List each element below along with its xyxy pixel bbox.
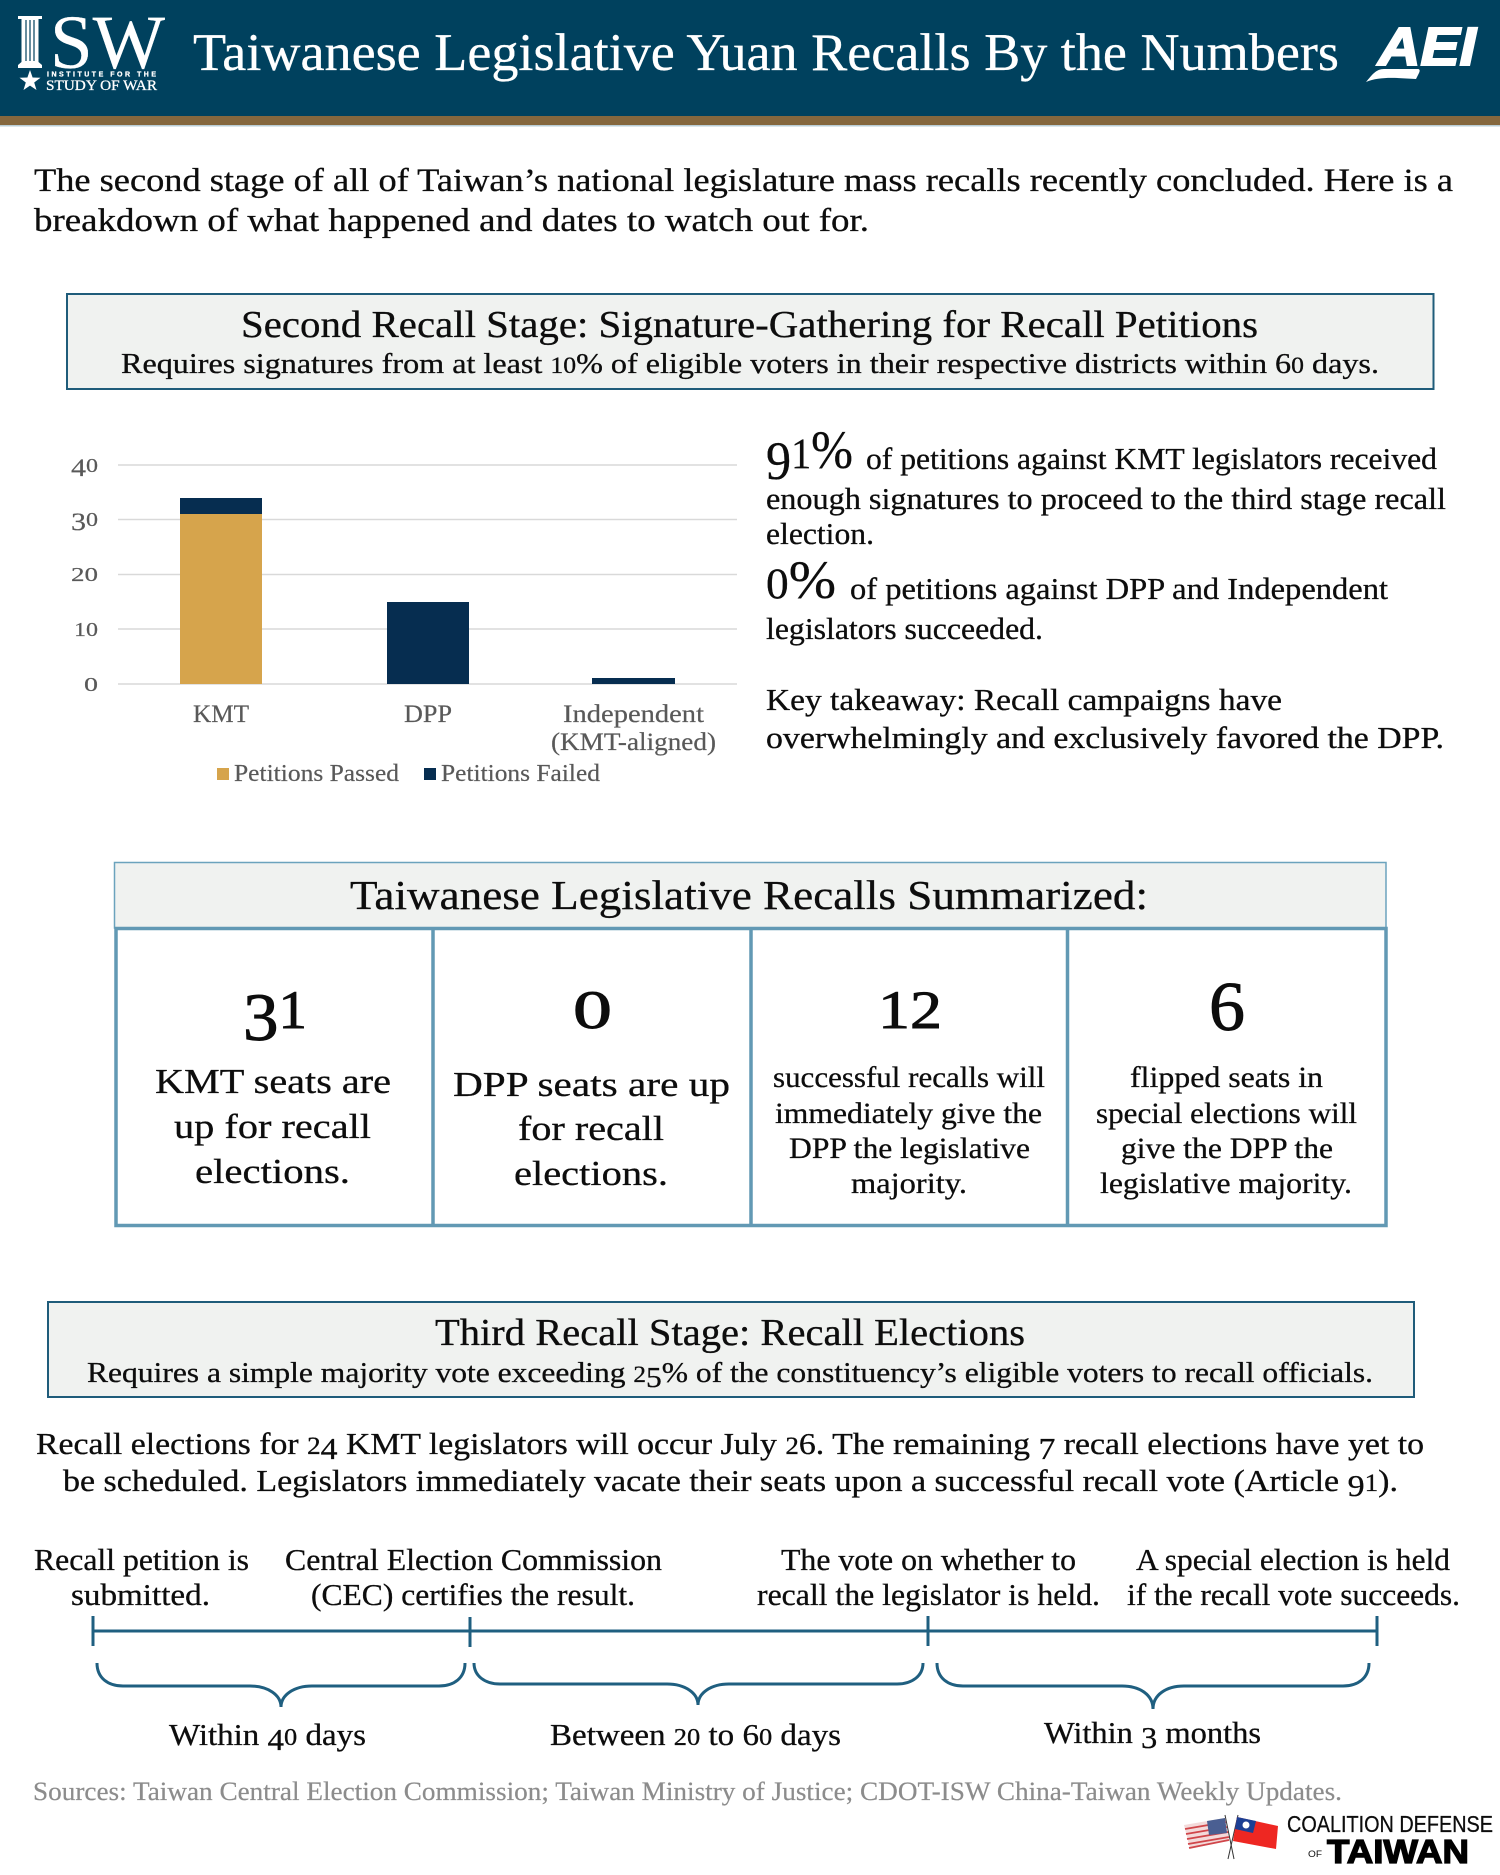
statistic: 91%: % bbox=[811, 420, 856, 480]
card: 12 successful recalls: successful recalls will bbox=[773, 1061, 1045, 1094]
text block: recall election schedule: 7 bbox=[1038, 1431, 1055, 1466]
card: 6 flipped seats: give the DPP the bbox=[1121, 1132, 1333, 1165]
text block: recall election schedule: Recall elections for 2 bbox=[36, 1426, 320, 1461]
bar: KMT bbox=[180, 498, 262, 684]
card: 0 DPP seats: for recall bbox=[518, 1109, 664, 1148]
brace: within 3 months: Within bbox=[1044, 1716, 1128, 1750]
x axis labels: (KMT-aligned) bbox=[551, 729, 716, 756]
bar chart: petitions by party bbox=[71, 455, 737, 787]
panel: second recall stage heading: Requires signatures from at least 10% of eligible voters in their respective districts within 6 0 days. bbox=[121, 348, 1379, 380]
panel: second recall stage heading bbox=[67, 294, 1434, 389]
card: 0 DPP seats: elections. bbox=[514, 1154, 668, 1193]
card: 6 flipped seats bbox=[1096, 969, 1357, 1200]
legend bbox=[217, 761, 600, 787]
AEI logo: AEI bbox=[1376, 17, 1477, 77]
header banner bbox=[0, 0, 1500, 126]
panel: recalls summarized bbox=[114, 862, 1386, 1227]
card: 31 KMT seats: up for recall bbox=[174, 1107, 371, 1146]
y axis labels bbox=[71, 455, 98, 696]
icon: crossed flags bbox=[1184, 1815, 1278, 1859]
legend: Petitions Failed bbox=[441, 761, 600, 787]
intro text bbox=[34, 163, 1453, 239]
text block: recall election schedule: 1 bbox=[1365, 1470, 1378, 1497]
timeline step labels: Central Election Commission bbox=[285, 1543, 662, 1577]
card: 31 KMT seats: 1 bbox=[279, 980, 307, 1040]
brace: within 40 days: days bbox=[305, 1718, 361, 1752]
timeline step labels: (CEC) certifies the result. bbox=[311, 1578, 635, 1612]
card: 6 flipped seats: legislative majority. bbox=[1100, 1167, 1352, 1200]
Coalition Defense of Taiwan logo: OF bbox=[1308, 1849, 1323, 1859]
legend: Petitions Passed bbox=[234, 761, 399, 787]
callout: petition statistics and key takeaway bbox=[766, 420, 1446, 755]
y axis labels: 3 bbox=[71, 509, 86, 536]
statistic: 0%: of petitions against DPP and Independent bbox=[850, 572, 1389, 606]
text block: recall election schedule: 9 bbox=[1348, 1468, 1365, 1503]
text block: recall election schedule: be scheduled. Legislators immediately vacate their seats upon a successful recall vote (Article bbox=[63, 1463, 1228, 1498]
panel: second recall stage heading: Second Recall Stage: Signature-Gathering for Recall Petitions bbox=[241, 304, 1258, 346]
Coalition Defense of Taiwan logo: TAIWAN bbox=[1327, 1833, 1469, 1870]
card: 31 KMT seats: KMT seats are bbox=[155, 1062, 391, 1101]
summary heading: Taiwanese Legislative Recalls Summarized: bbox=[350, 872, 1148, 918]
x axis labels: KMT bbox=[193, 701, 249, 728]
timeline step labels: submitted. bbox=[71, 1578, 210, 1612]
intro text: The second stage of all of Taiwan’s national legislature mass recalls recently concluded. Here is a bbox=[34, 163, 1453, 199]
timeline step labels: The vote on whether to bbox=[781, 1543, 1076, 1577]
card: 12 successful recalls: majority. bbox=[851, 1167, 967, 1200]
y axis labels: 4 bbox=[71, 455, 87, 482]
card: 31 KMT seats: elections. bbox=[195, 1152, 350, 1191]
text block: recall election schedule: 26. The remaining bbox=[785, 1426, 1011, 1461]
intro text: breakdown of what happened and dates to watch out for. bbox=[34, 203, 869, 239]
card: 12 successful recalls: 12 bbox=[878, 980, 942, 1040]
timeline step labels bbox=[34, 1543, 1460, 1612]
brace: within 40 days: Within bbox=[169, 1718, 252, 1752]
text block: recall election schedule: recall elections have yet to bbox=[1055, 1426, 1424, 1461]
card: 31 KMT seats bbox=[155, 979, 391, 1191]
statistic: 91%: enough signatures to proceed to the third stage recall bbox=[766, 482, 1446, 516]
card: 6 flipped seats: 6 bbox=[1209, 969, 1245, 1046]
brace: within 40 days: 0 bbox=[284, 1724, 297, 1751]
summary heading bbox=[114, 862, 1386, 928]
timeline step labels: if the recall vote succeeds. bbox=[1127, 1578, 1460, 1612]
card: 12 successful recalls: immediately give the bbox=[775, 1097, 1042, 1130]
timeline step labels: A special election is held bbox=[1136, 1543, 1450, 1577]
card: 12 successful recalls: DPP the legislative bbox=[789, 1132, 1030, 1165]
ISW logo bbox=[18, 1, 165, 94]
ISW logo: SW bbox=[50, 1, 165, 85]
title: Taiwanese Legislative Yuan Recalls By the Numbers bbox=[193, 24, 1339, 82]
statistic: 91% bbox=[766, 420, 1446, 551]
key takeaway bbox=[766, 683, 1444, 755]
brace: within 3 months: months bbox=[1157, 1716, 1261, 1750]
timeline step labels: recall the legislator is held. bbox=[757, 1578, 1100, 1612]
panel: third recall stage heading: of the constituency’s eligible voters to recall officials. bbox=[695, 1357, 1318, 1389]
sources: Sources: Taiwan Central Election Commission; Taiwan Ministry of Justice; CDOT-ISW China-Taiwan Weekly Updates. bbox=[33, 1777, 1342, 1806]
text block: recall election schedule bbox=[36, 1426, 1424, 1503]
card: 6 flipped seats: flipped seats in bbox=[1130, 1061, 1323, 1094]
brace: between 20 to 60 days: Between 20 to 60 days bbox=[550, 1718, 841, 1752]
x axis labels bbox=[193, 701, 716, 756]
card: 0 DPP seats: DPP seats are up bbox=[453, 1065, 730, 1104]
panel: third recall stage heading: % bbox=[662, 1357, 688, 1389]
x axis labels: Independent bbox=[563, 701, 704, 728]
summary grid bbox=[116, 928, 1386, 1227]
bar: DPP bbox=[387, 602, 469, 684]
key takeaway: overwhelmingly and exclusively favored the DPP. bbox=[766, 721, 1444, 755]
statistic: 0%: 0% bbox=[766, 550, 836, 610]
statistic: 0%: legislators succeeded. bbox=[766, 612, 1043, 646]
ISW logo: STUDY OF WAR bbox=[46, 78, 157, 94]
statistic: 91%: 9 bbox=[766, 431, 791, 491]
statistic: 91%: of petitions against KMT legislators received bbox=[866, 442, 1437, 476]
y axis labels: 0 bbox=[84, 674, 98, 696]
statistic: 0% bbox=[766, 550, 1389, 646]
y axis labels: 20 bbox=[71, 564, 98, 586]
timeline bbox=[34, 1543, 1460, 1757]
y axis labels: 10 bbox=[74, 619, 98, 641]
card: 6 flipped seats: special elections will bbox=[1096, 1097, 1357, 1130]
brace: within 3 months bbox=[937, 1663, 1369, 1755]
panel: third recall stage heading: Third Recall Stage: Recall Elections bbox=[435, 1312, 1025, 1354]
card: 0 DPP seats: 0 bbox=[573, 980, 612, 1040]
card: 12 successful recalls bbox=[773, 980, 1045, 1200]
panel: third recall stage heading: 5 bbox=[646, 1362, 662, 1394]
timeline step labels: Recall petition is bbox=[34, 1543, 249, 1577]
bar: Independent bbox=[592, 678, 675, 684]
panel: third recall stage heading bbox=[48, 1302, 1414, 1397]
text block: recall election schedule: KMT legislators will occur July bbox=[338, 1426, 785, 1461]
ISW logo: INSTITUTE FOR THE bbox=[47, 72, 156, 78]
brace: between 20 to 60 days bbox=[474, 1663, 923, 1752]
timeline axis bbox=[93, 1616, 1377, 1647]
brace: within 3 months: 3 bbox=[1141, 1721, 1157, 1755]
brace: within 40 days: 4 bbox=[268, 1723, 284, 1757]
y axis labels: 0 bbox=[86, 455, 98, 477]
card: 0 DPP seats bbox=[453, 980, 730, 1193]
Coalition Defense of Taiwan logo bbox=[1184, 1811, 1493, 1870]
y axis labels: 0 bbox=[86, 509, 98, 531]
x axis labels: DPP bbox=[404, 701, 452, 728]
brace: within 40 days bbox=[97, 1663, 465, 1757]
statistic: 91%: election. bbox=[766, 517, 874, 551]
text block: recall election schedule: 4 bbox=[321, 1431, 338, 1466]
statistic: 91%: 1 bbox=[791, 431, 811, 478]
text block: recall election schedule: ). bbox=[1378, 1463, 1396, 1498]
card: 31 KMT seats: 3 bbox=[243, 979, 279, 1055]
key takeaway: Key takeaway: Recall campaigns have bbox=[766, 683, 1282, 717]
panel: third recall stage heading: Requires a simple majority vote exceeding 2 bbox=[87, 1357, 645, 1389]
